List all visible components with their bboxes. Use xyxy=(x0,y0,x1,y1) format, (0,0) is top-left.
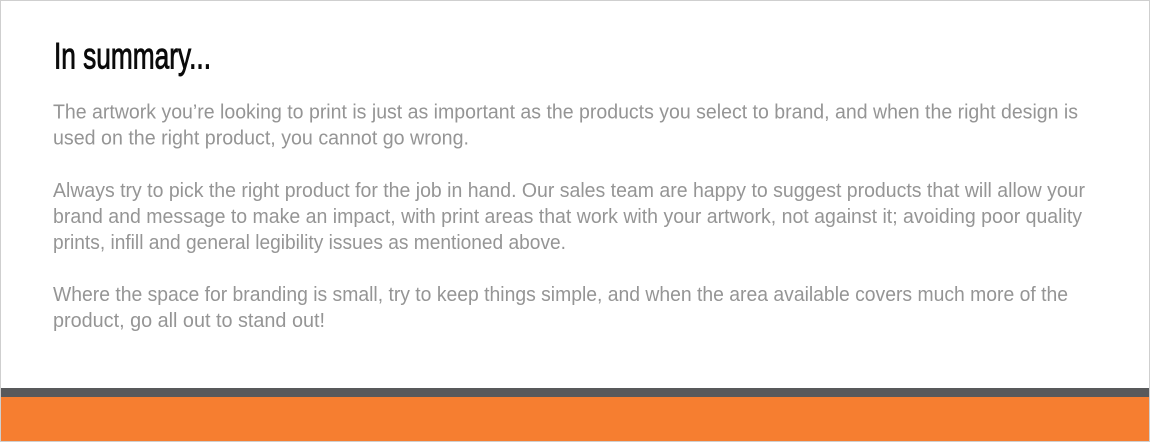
text block: paragraph 2: brand and message to make an impact, with print areas that work with your artwork, not against it; avoiding poor quality xyxy=(53,206,1082,228)
text block: paragraph 1: used on the right product, you cannot go wrong. xyxy=(53,128,469,150)
footer: dark grey band xyxy=(1,388,1149,397)
text block: paragraph 2: Always try to pick the right product for the job in hand. Our sales team are happy to suggest products that will allow your xyxy=(53,180,1085,202)
text block: paragraph 3: product, go all out to stand out! xyxy=(53,310,325,332)
title: In summary... xyxy=(54,36,211,76)
text block: paragraph 3 xyxy=(53,284,1068,332)
text block: paragraph 2: prints, infill and general legibility issues as mentioned above. xyxy=(53,232,566,254)
text block: paragraph 1 xyxy=(53,102,1078,150)
text block: paragraph 3: Where the space for branding is small, try to keep things simple, and when the area available covers much more of the xyxy=(53,284,1068,306)
footer: orange band xyxy=(1,397,1149,441)
text block: paragraph 1: The artwork you’re looking to print is just as important as the products you select to brand, and when the right design is xyxy=(53,102,1078,124)
text block: paragraph 2 xyxy=(53,180,1085,254)
